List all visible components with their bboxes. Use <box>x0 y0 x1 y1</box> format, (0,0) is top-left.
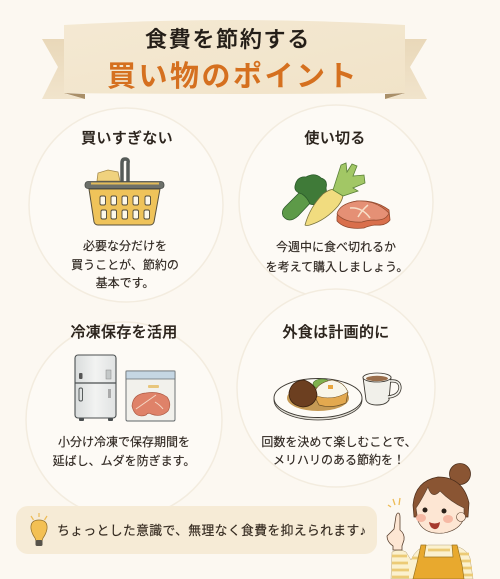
heading: freezer: 冷凍保存を活用 <box>70 324 178 341</box>
text: buy less: 基本です。 <box>96 276 154 290</box>
icon: woman pointing up <box>387 464 473 579</box>
icon: frozen meat bag <box>126 371 175 421</box>
sleeves and body <box>391 545 473 579</box>
icon: vegetables and meat <box>282 163 390 228</box>
title line 2: 買い物のポイント <box>107 60 359 93</box>
pointing hand <box>387 513 404 550</box>
hair bun <box>450 464 470 484</box>
icon: light bulb <box>31 513 47 546</box>
callout text: ちょっとした意識で、無理なく食費を抑えられます♪ <box>57 523 366 538</box>
panel: eating out <box>237 289 435 487</box>
title banner <box>42 20 427 99</box>
icon: refrigerator <box>75 355 116 421</box>
text: freezer <box>53 435 195 468</box>
text: use it up <box>266 239 408 274</box>
text: eating out: 回数を決めて楽しむことで、 <box>261 434 417 449</box>
text: freezer: 延ばし、ムダを防ぎます。 <box>53 453 195 468</box>
heading: eating out: 外食は計画的に <box>282 324 390 341</box>
panel: freezer <box>26 322 222 518</box>
title line 1: 食費を節約する <box>145 27 311 52</box>
icon: shopping basket <box>85 159 164 225</box>
sparkle lines <box>388 498 400 507</box>
face <box>416 487 464 533</box>
text: use it up: 今週中に食べ切れるか <box>276 239 396 254</box>
text: eating out: メリハリのある節約を！ <box>273 452 405 467</box>
panel: use it up <box>239 105 433 299</box>
apron <box>413 545 464 579</box>
callout <box>16 506 377 554</box>
text: use it up: を考えて購入しましょう。 <box>266 260 408 274</box>
text: buy less: 買うことが、節約の <box>71 257 179 272</box>
heading: buy less: 買いすぎない <box>81 130 173 147</box>
text: buy less <box>71 239 179 290</box>
icon: plate of food and coffee <box>274 373 400 420</box>
heading: use it up: 使い切る <box>304 130 366 147</box>
hair <box>413 477 469 517</box>
text: eating out <box>261 434 417 467</box>
text: buy less: 必要な分だけを <box>83 239 167 253</box>
text: freezer: 小分け冷凍で保存期間を <box>58 435 190 449</box>
panel: buy less <box>29 108 223 302</box>
